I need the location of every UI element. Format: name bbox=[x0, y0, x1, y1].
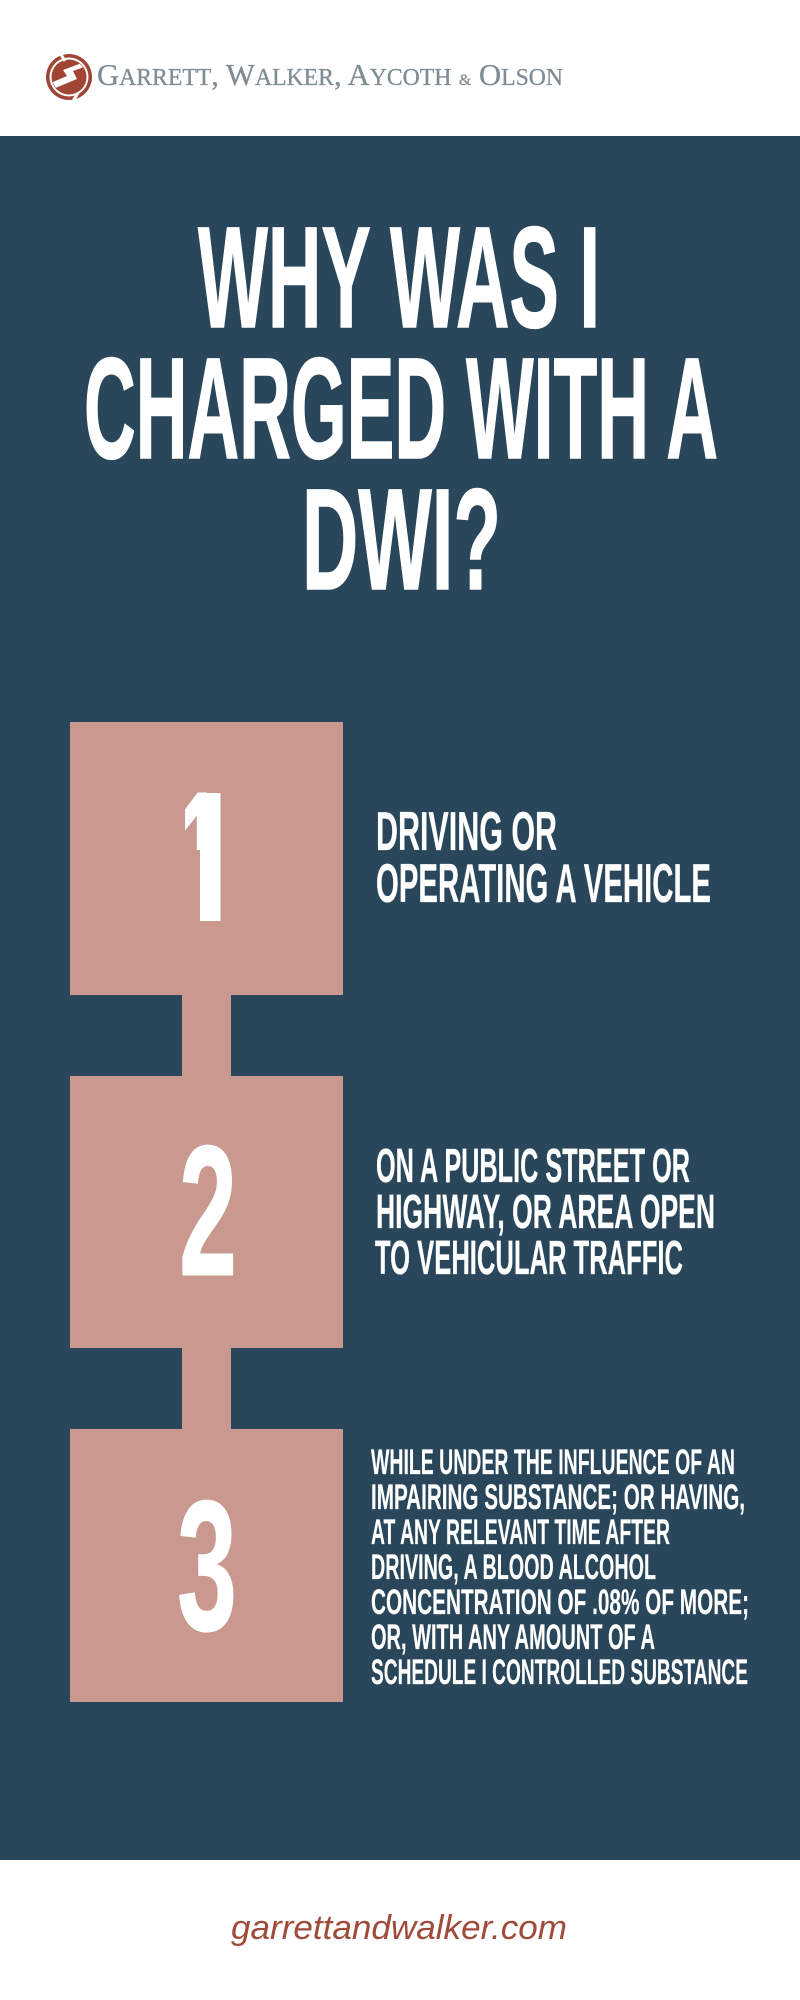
connector: step 2 to 3 bbox=[182, 1348, 231, 1430]
step 1 bbox=[70, 722, 711, 995]
step 2 bbox=[70, 1076, 715, 1348]
step 3 bbox=[70, 1429, 749, 1702]
logo header bbox=[46, 53, 563, 101]
connector: step 1 to 2 bbox=[182, 995, 231, 1077]
number box 1 bbox=[70, 722, 343, 995]
step 1 text bbox=[376, 800, 711, 914]
step 1 text: DRIVING OR bbox=[376, 800, 557, 862]
number box 3 bbox=[70, 1429, 343, 1702]
number box 1: 1 bbox=[176, 754, 226, 961]
step 3 text bbox=[371, 1442, 749, 1692]
number box 3: 3 bbox=[177, 1463, 237, 1670]
icon: firm logo bbox=[46, 53, 92, 101]
number box 2 bbox=[70, 1076, 343, 1348]
logo wordmark: GARRETT, WALKER, AYCOTH & OLSON bbox=[97, 57, 563, 92]
step 2 text bbox=[375, 1140, 715, 1285]
footer website: garrettandwalker.com bbox=[231, 1909, 567, 1947]
number box 2: 2 bbox=[179, 1108, 237, 1315]
title: DWI? bbox=[302, 459, 501, 620]
title bbox=[84, 197, 718, 620]
